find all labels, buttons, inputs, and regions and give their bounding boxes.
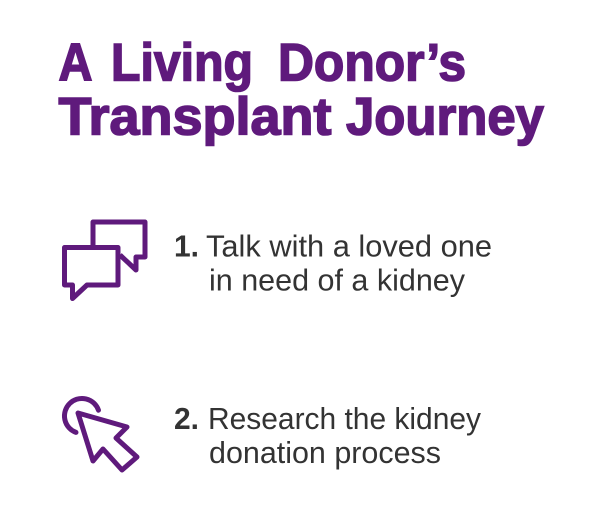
title: Living xyxy=(111,34,253,92)
step 1 text xyxy=(174,230,492,298)
title: Transplant xyxy=(58,88,332,146)
step 1 text: Talk with a loved one xyxy=(206,230,492,264)
title xyxy=(58,34,544,146)
step 2 text: 2. xyxy=(174,402,199,436)
step 2 text: Research the kidney xyxy=(208,402,482,436)
title: A xyxy=(58,34,92,92)
step 2 text: donation process xyxy=(209,436,441,470)
icon: speech bubbles xyxy=(64,222,145,298)
step 2 text xyxy=(174,402,482,470)
title: Journey xyxy=(346,88,544,146)
icon: cursor click xyxy=(64,398,137,470)
step 1 text: 1. xyxy=(174,230,199,264)
title: Donor’s xyxy=(278,34,466,92)
step 1 text: in need of a kidney xyxy=(209,264,466,298)
